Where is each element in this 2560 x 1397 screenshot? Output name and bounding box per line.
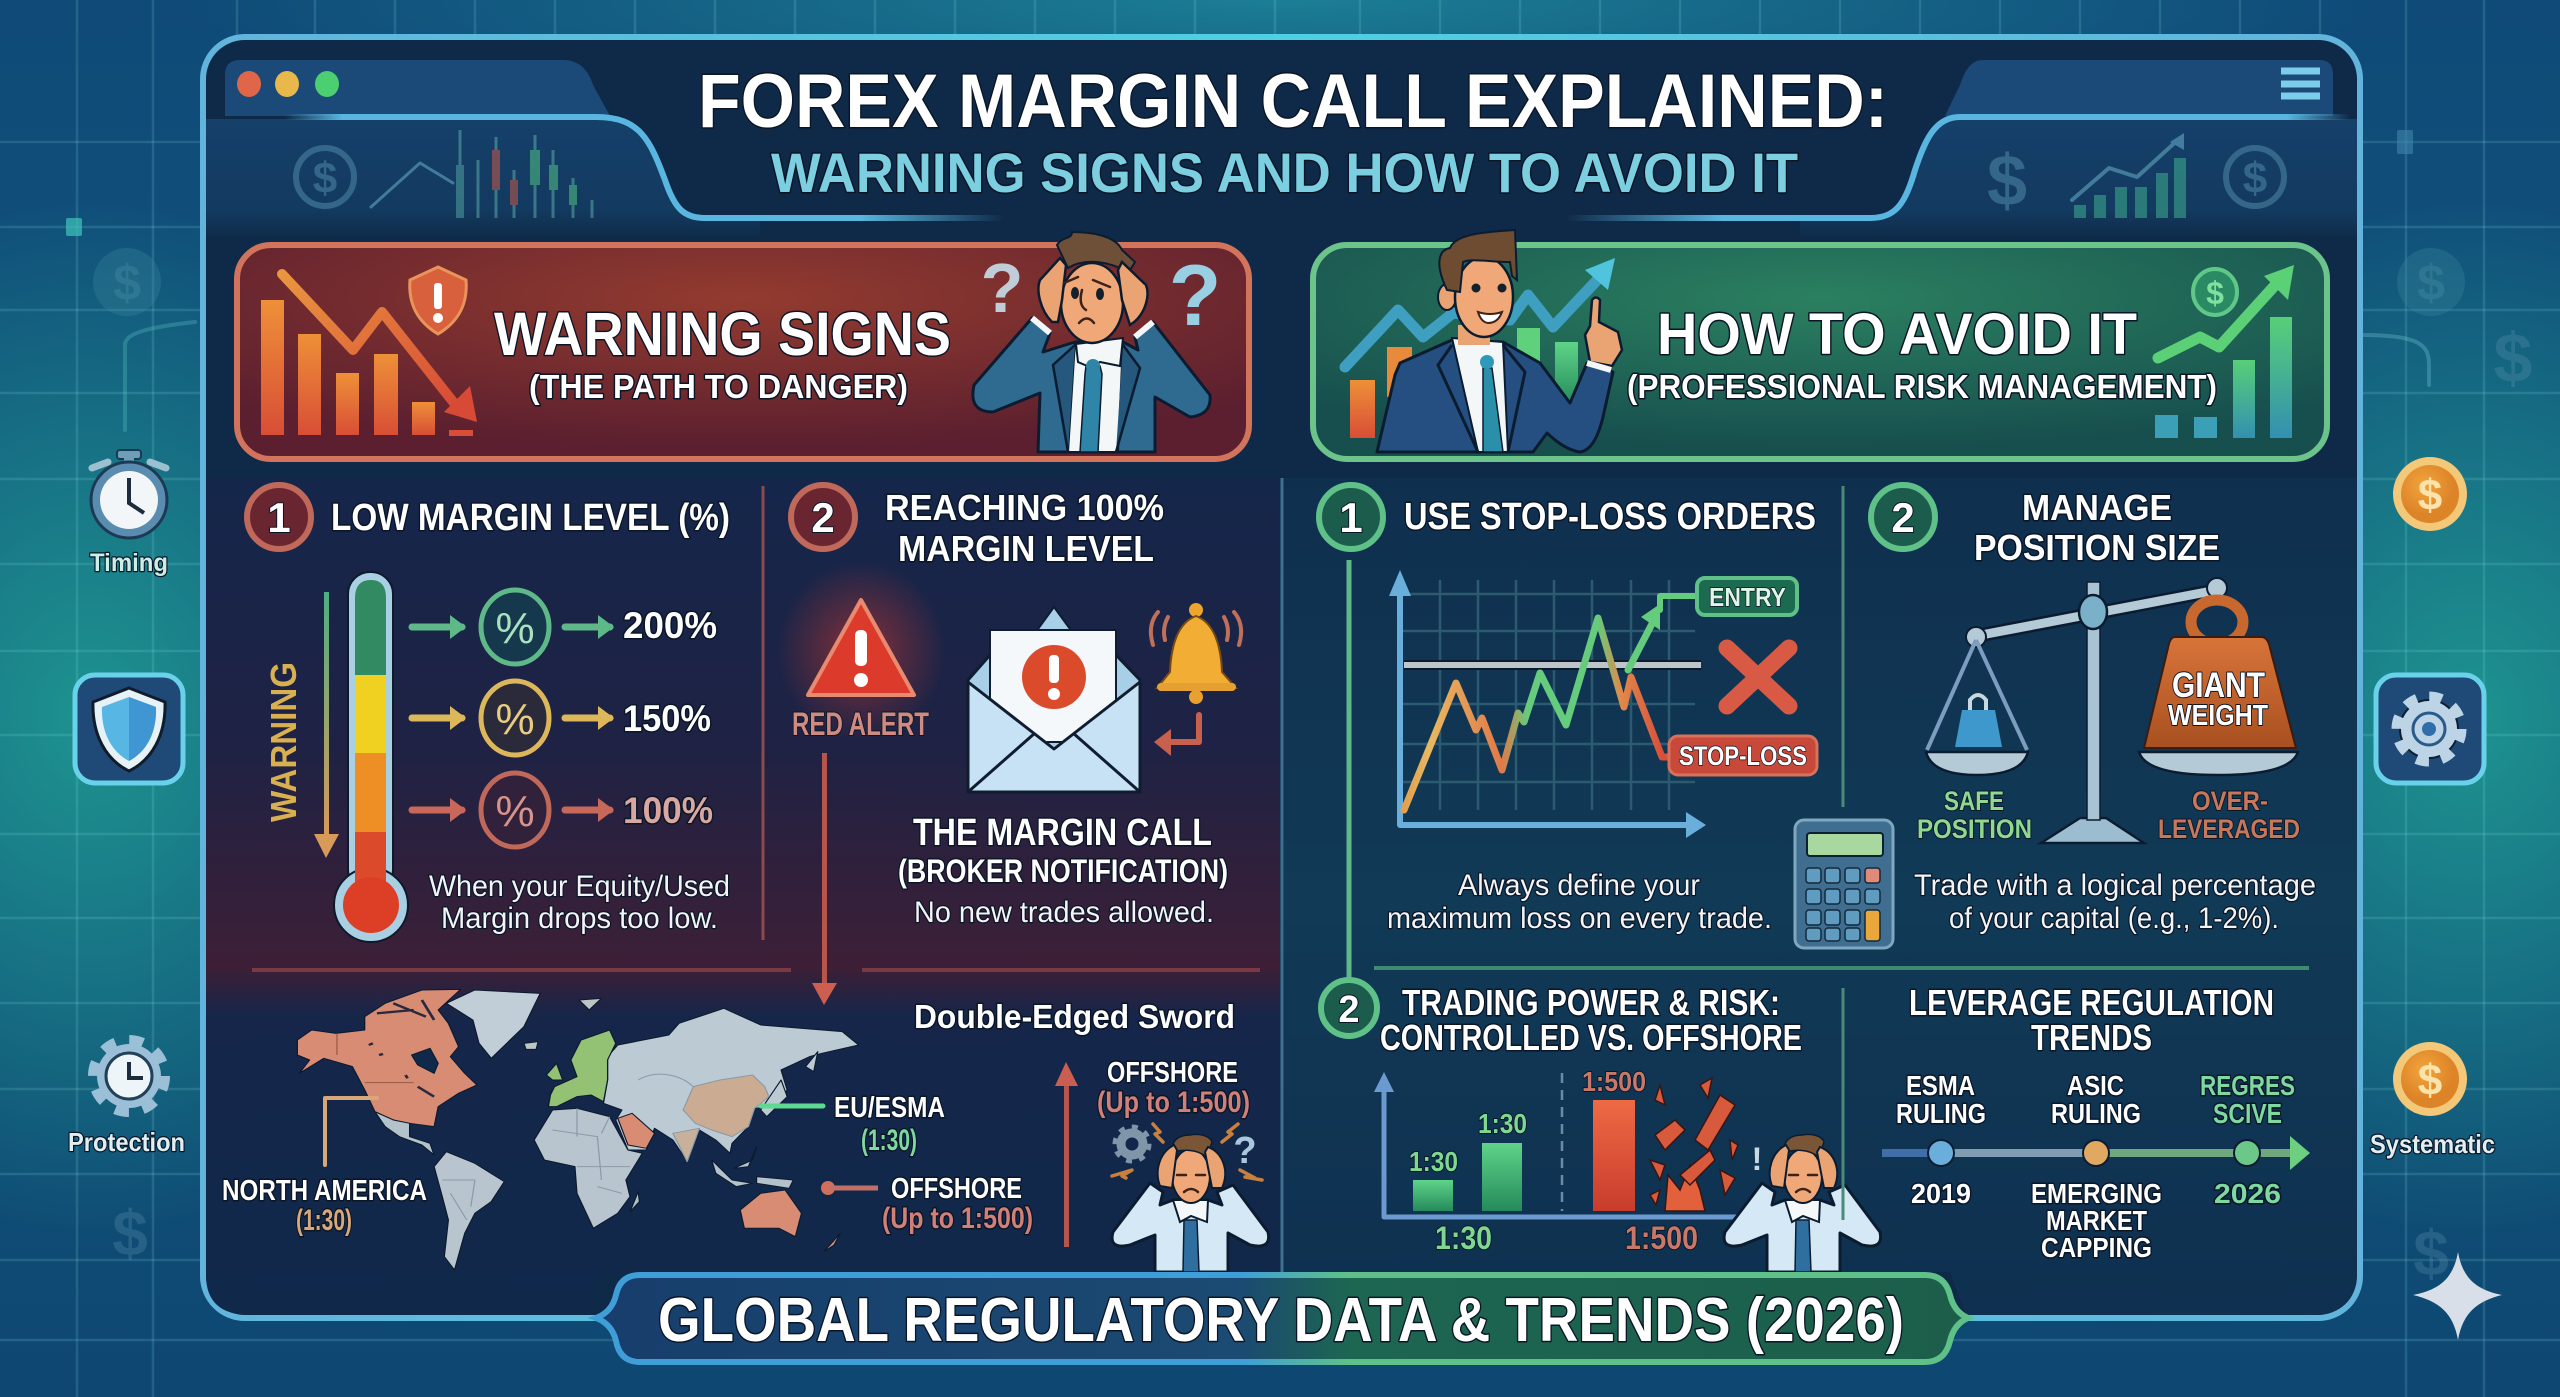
return arrow: [1154, 715, 1199, 756]
thermometer gauge: [334, 572, 408, 942]
africa: [534, 1108, 642, 1228]
header tabs: [206, 60, 2357, 240]
label: north america: (1:30): [296, 1204, 352, 1237]
label: north america: [222, 1175, 427, 1237]
facial features: [1472, 284, 1480, 292]
icon: red cross: [1727, 648, 1789, 706]
step number 2: [791, 485, 855, 549]
ASIC ruling label: CAPPING: [2041, 1232, 2152, 1263]
label: Protection: Protection: [68, 1127, 185, 1157]
level row 100%: [412, 773, 713, 847]
description: maximum loss on every trade.: [1387, 902, 1772, 935]
column divider: [1842, 486, 1844, 807]
regressive label: REGRES: [2200, 1070, 2295, 1101]
offshore label: [1097, 1057, 1250, 1119]
description: Always define your: [1458, 869, 1700, 902]
over-leveraged label: OVER-: [2192, 786, 2268, 816]
label: north america: NORTH AMERICA: [222, 1175, 427, 1207]
giant weight: [2139, 600, 2298, 775]
section heading: TRADING POWER & RISK:: [1402, 982, 1780, 1023]
trading power section: [1321, 980, 1881, 1272]
icon: systematic coin: $: [2418, 1056, 2442, 1105]
iceland and svalbard: [524, 998, 601, 1049]
greenland: [446, 990, 540, 1058]
hair: [1439, 230, 1517, 292]
description: Margin drops too low.: [441, 902, 718, 935]
rail segments: [126, 395, 132, 1020]
icon: dollar coin: $: [2418, 471, 2442, 520]
level row 200%: [412, 590, 717, 664]
step number 1: 1: [1339, 494, 1363, 541]
japan and sakhalin: [761, 1052, 818, 1117]
faint lower dollar: $: [2413, 1217, 2449, 1289]
falling bar chart: [261, 274, 477, 436]
step heading: USE STOP-LOSS ORDERS: [1404, 496, 1816, 538]
faint rising arrow: [125, 322, 195, 430]
arabia region: [618, 1113, 655, 1148]
leverage bar chart: 1:30: [1409, 1146, 1458, 1177]
step number 2: 2: [1338, 989, 1360, 1031]
giant weight: WEIGHT: [2168, 700, 2268, 732]
label: offshore: (Up to 1:500): [882, 1202, 1033, 1235]
icon: ringing bell: [1151, 603, 1241, 704]
down arrow to map: [812, 753, 837, 1005]
description: of your capital (e.g., 1-2%).: [1949, 902, 2279, 935]
hair: [1057, 232, 1135, 275]
face: [1061, 263, 1123, 343]
leader: north america: [325, 1098, 377, 1165]
step number 2: 2: [811, 494, 835, 541]
giant weight: GIANT: [2172, 666, 2265, 705]
ASIC ruling label: EMERGING: [2031, 1178, 2162, 1209]
southeast asian islands: [712, 1147, 793, 1188]
left tab upper area: [225, 60, 610, 116]
ESMA ruling label: 2019: [1911, 1178, 1971, 1209]
description: [1914, 869, 2316, 935]
level row 100%: %: [495, 787, 535, 836]
india region: [673, 1128, 699, 1162]
column divider: [1842, 988, 1844, 1220]
faint candle marker: [2397, 130, 2413, 154]
great britain: [546, 1063, 563, 1080]
margin call text: (BROKER NOTIFICATION): [898, 853, 1228, 889]
subtitle: WARNING SIGNS AND HOW TO AVOID IT: [771, 141, 1798, 204]
suit: [1377, 340, 1613, 452]
suit: [973, 318, 1210, 452]
faint background dollar coin: [93, 248, 161, 316]
warning step 2: reaching 100%: [776, 485, 1241, 1005]
madagascar: [630, 1192, 639, 1212]
label: offshore: OFFSHORE: [891, 1173, 1022, 1205]
step number 1: 1: [267, 494, 291, 541]
description: [429, 870, 730, 935]
margin call text: No new trades allowed.: [914, 896, 1214, 929]
margin call text: [898, 812, 1228, 929]
china region: [683, 1075, 769, 1137]
faint right header charts: $: [1987, 141, 2027, 221]
shirt and tie: [1068, 342, 1123, 452]
step heading: REACHING 100%: [885, 487, 1164, 528]
regressive label: [2200, 1070, 2295, 1209]
step number 2: [1871, 485, 1935, 549]
icon: systematic coin: [2393, 1042, 2467, 1116]
stress icons: [1112, 1124, 1262, 1180]
faint left header charts: [296, 130, 592, 218]
main dashboard frame: [203, 37, 2360, 1318]
safe pan: [1926, 640, 2028, 775]
ESMA ruling label: RULING: [1896, 1098, 1986, 1129]
leverage bar chart: 1:500: [1625, 1220, 1698, 1256]
step number 2: [1321, 980, 1377, 1036]
level row 200%: %: [495, 604, 535, 653]
leader: EU/ESMA: [761, 1104, 823, 1108]
level row 100%: 100%: [623, 790, 713, 831]
icon: question marks: [981, 248, 1221, 344]
faint background dollar coin: [2397, 248, 2465, 316]
ASIC ruling label: RULING: [2051, 1098, 2141, 1129]
label: EU/ESMA: EU/ESMA: [834, 1092, 945, 1124]
step heading: MARGIN LEVEL: [898, 528, 1154, 569]
new zealand: [824, 1233, 840, 1252]
avoid step 2: manage position size: [1871, 485, 2316, 935]
footer pill: [596, 1275, 1968, 1362]
over-leveraged label: [2158, 786, 2300, 844]
step heading: [1974, 487, 2220, 568]
panel background: warning signs column: [206, 478, 1280, 1315]
safe position label: SAFE: [1944, 786, 2004, 816]
left tab line: [285, 117, 1004, 218]
label: EU/ESMA: (1:30): [861, 1124, 917, 1157]
icon: question marks: ?: [1169, 248, 1221, 344]
window control dots: [237, 71, 339, 97]
heading: TRENDS: [2031, 1017, 2152, 1058]
step heading: POSITION SIZE: [1974, 527, 2220, 568]
hudson bay: [412, 1048, 438, 1073]
over-leveraged label: LEVERAGED: [2158, 814, 2300, 844]
faint lower dollar: $: [112, 1197, 148, 1269]
level row 150%: [412, 681, 711, 755]
step heading: MANAGE: [2022, 487, 2172, 528]
heading: Double-Edged Sword: [914, 998, 1235, 1035]
description: When your Equity/Used: [429, 870, 730, 903]
character: worried trader: [973, 232, 1210, 452]
left tab lower area: [206, 119, 760, 240]
stress icons: ?: [1233, 1130, 1257, 1172]
central column divider: [1280, 478, 1284, 1275]
banner heading: WARNING SIGNS: [494, 300, 951, 368]
faint dollar: $: [2494, 319, 2532, 397]
south america: [434, 1152, 504, 1270]
level row 150%: %: [495, 695, 535, 744]
panel: warning signs banner: [237, 232, 1249, 459]
ASIC ruling label: ASIC: [2067, 1070, 2124, 1101]
character: stressed trader: [1112, 1134, 1269, 1272]
icon: question marks: ?: [981, 249, 1023, 327]
character: confident trader: [1377, 230, 1622, 452]
warning step 1: low margin level: [247, 485, 730, 942]
safe position label: [1917, 786, 2032, 844]
leverage regulation trends: [1882, 982, 2310, 1263]
faint right header charts: $: [2243, 154, 2267, 203]
leverage bar chart: [1374, 1066, 1737, 1256]
ASIC ruling label: MARKET: [2046, 1205, 2147, 1236]
stop-loss tag: STOP-LOSS: [1679, 741, 1807, 771]
leader: offshore: [821, 1181, 878, 1195]
world map: [222, 989, 1033, 1270]
us-canada border: [337, 1033, 414, 1083]
section heading: [1380, 982, 1802, 1058]
hamburger menu icon: [2281, 71, 2320, 96]
hands: [1038, 258, 1066, 322]
exploding bar: [1650, 1078, 1738, 1211]
timeline: [1882, 1136, 2310, 1170]
column divider: [762, 486, 764, 940]
rising chart with coin: $: [2206, 275, 2224, 311]
label: red alert: RED ALERT: [792, 706, 929, 742]
label: Timing: Timing: [90, 549, 168, 577]
step number 1: [1319, 485, 1383, 549]
description: [1387, 869, 1772, 935]
footer text: GLOBAL REGULATORY DATA & TRENDS (2026): [658, 1286, 1904, 1355]
faint candle marker: [66, 218, 82, 236]
offshore label: OFFSHORE: [1107, 1057, 1238, 1089]
stop-loss line chart: [1389, 570, 1706, 838]
panel: how to avoid it banner: [1313, 230, 2327, 459]
right tab line: [1566, 117, 2350, 218]
pointing hand: [1585, 298, 1622, 366]
label: EU/ESMA: [834, 1092, 945, 1157]
step heading: [885, 487, 1164, 569]
character: stressed trader: [1724, 1134, 1881, 1272]
ESMA ruling label: [1896, 1070, 1986, 1209]
icon: red alert triangle: [776, 560, 946, 740]
stop-loss tag: [1669, 736, 1817, 775]
asia: [604, 1008, 859, 1162]
level row 150%: 150%: [623, 698, 711, 739]
description: Trade with a logical percentage: [1914, 869, 2316, 902]
icon: warning shield: [410, 267, 466, 334]
double-edged sword block: [914, 998, 1269, 1272]
title: FOREX MARGIN CALL EXPLAINED:: [698, 59, 1888, 144]
up arrow: [1055, 1062, 1078, 1247]
rising chart with coin: [2155, 265, 2294, 438]
icon: four-point sparkle: [2413, 1252, 2502, 1340]
europe region: [548, 1030, 616, 1107]
regressive label: SCIVE: [2213, 1098, 2282, 1129]
icon: protection gear: [95, 1042, 163, 1110]
step number 1: [247, 485, 311, 549]
left growth chart: [1345, 258, 1615, 438]
warning direction arrow: [314, 592, 339, 858]
section heading: CONTROLLED VS. OFFSHORE: [1380, 1017, 1802, 1058]
faint right header charts: [1987, 133, 2284, 221]
right tab lower area: [1800, 119, 2357, 240]
panel background: avoid-it column: [1284, 478, 2357, 1315]
icon: stopwatch: [91, 450, 167, 538]
canadian arctic and lakes: [369, 1000, 434, 1097]
rotated warning label: WARNING: [263, 662, 304, 822]
icon: dollar coin: [2393, 457, 2467, 531]
section separators: [252, 968, 1260, 972]
left side rail: [66, 218, 195, 1269]
australia region: [740, 1190, 801, 1237]
level row 200%: 200%: [623, 605, 717, 646]
ASIC ruling label: [2031, 1070, 2162, 1263]
step connector: [1346, 560, 1352, 977]
icon: calculator: [1795, 820, 1893, 948]
heading: [1909, 982, 2274, 1058]
label: offshore: [882, 1173, 1033, 1235]
faint left header charts: $: [313, 154, 337, 203]
north america region: [297, 989, 477, 1127]
right side rail: [2362, 130, 2532, 1289]
icon: exclamation: !: [1752, 1141, 1762, 1177]
facial features: [1071, 287, 1079, 299]
offshore label: (Up to 1:500): [1097, 1086, 1250, 1119]
right tab upper area: [1945, 60, 2333, 116]
avoid step 1: stop-loss orders: [1319, 485, 1817, 977]
label: Systematic: Systematic: [2370, 1129, 2495, 1159]
leverage bar chart: 1:500: [1582, 1066, 1646, 1097]
heading: LEVERAGE REGULATION: [1909, 982, 2274, 1023]
faint background dollar coin: $: [2417, 255, 2445, 311]
regressive label: 2026: [2214, 1178, 2281, 1209]
leverage bar chart: 1:30: [1435, 1220, 1492, 1256]
icon: gear box: [2376, 675, 2484, 783]
country borders: [442, 1074, 693, 1220]
faint curve to rail: [2362, 335, 2429, 385]
central america: [375, 1112, 434, 1155]
rail segments: [2426, 385, 2432, 1020]
neck and face: [1458, 325, 1490, 345]
shirt and tie: [1452, 338, 1508, 452]
banner heading: HOW TO AVOID IT: [1657, 302, 2137, 367]
balance scale illustration: [1926, 578, 2298, 843]
icon: shield box: [75, 675, 183, 783]
banner subheading: (PROFESSIONAL RISK MANAGEMENT): [1627, 368, 2217, 405]
step number 2: 2: [1891, 494, 1915, 541]
safe position label: POSITION: [1917, 814, 2032, 844]
margin call text: THE MARGIN CALL: [913, 812, 1212, 854]
faint background dollar coin: $: [113, 255, 141, 311]
entry tag: ENTRY: [1709, 582, 1786, 612]
banner subheading: (THE PATH TO DANGER): [529, 368, 908, 405]
step heading: LOW MARGIN LEVEL (%): [331, 497, 730, 539]
ESMA ruling label: ESMA: [1906, 1070, 1975, 1101]
leverage bar chart: 1:30: [1478, 1108, 1527, 1139]
icon: envelope with alert: [968, 607, 1140, 792]
